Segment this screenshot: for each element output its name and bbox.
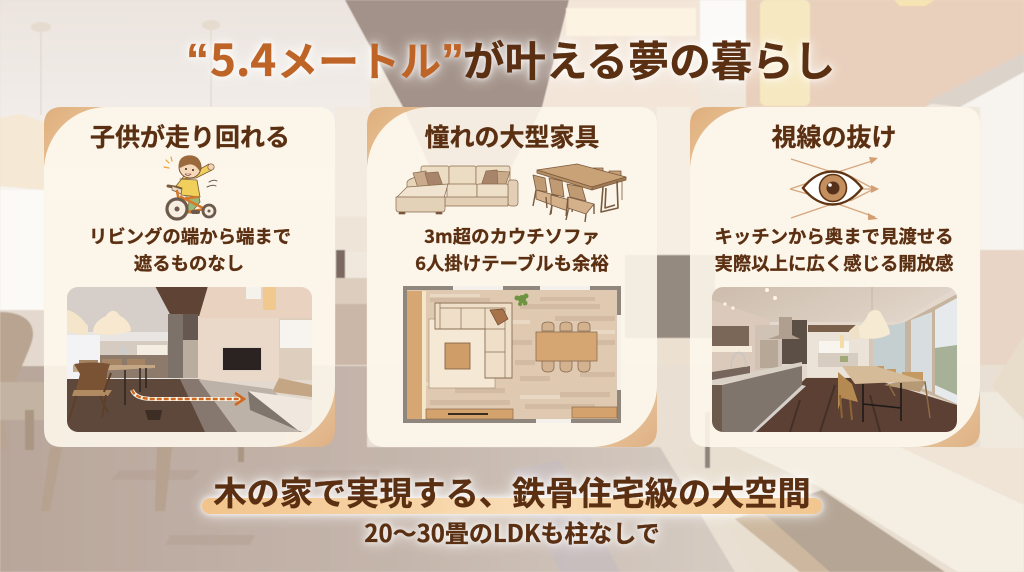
title: メートル <box>277 28 441 88</box>
highlight pill <box>202 498 822 514</box>
text: description: リビングの端から端まで <box>89 223 291 249</box>
bottom headline: 木の家で実現する、鉄骨住宅級の大空間 <box>213 466 811 515</box>
text: description: キッチンから奥まで見渡せる <box>714 223 954 249</box>
text: description: 6人掛けテーブルも余裕 <box>415 250 609 276</box>
plant <box>514 294 528 306</box>
panel: large furniture <box>367 107 657 447</box>
sofa on plan <box>435 303 512 378</box>
heading: 子供が走り回れる: 子供が走り回れる <box>90 118 290 154</box>
text: description <box>89 223 291 276</box>
heading: 憧れの大型家具: 憧れの大型家具 <box>424 118 600 154</box>
heading: 視線の抜け: 視線の抜け <box>771 118 897 154</box>
icon: eye with sight lines <box>790 157 879 220</box>
title: ” <box>441 34 464 86</box>
icon: couch sofa <box>396 166 518 214</box>
bottom subheading: 20〜30畳のLDKも柱なしで <box>364 514 660 549</box>
photo: living room with dashed path arrow <box>67 286 312 432</box>
coffee table <box>445 343 470 369</box>
text: description: 3m超のカウチソファ <box>424 223 600 249</box>
text: description <box>714 223 954 276</box>
icon: dining table with chairs <box>533 164 626 222</box>
title: 5.4 <box>210 25 276 89</box>
text: description: 遮るものなし <box>134 250 244 276</box>
dining table on plan <box>536 322 597 372</box>
text: description <box>415 223 609 276</box>
panel: children run around <box>44 107 335 447</box>
title <box>186 25 835 89</box>
title: “ <box>186 34 209 86</box>
panel: open sight lines <box>690 107 980 447</box>
floor plan diagram <box>403 286 621 423</box>
icon: child on tricycle <box>164 155 217 219</box>
photo: kitchen and dining <box>712 286 957 432</box>
title: が叶える夢の暮らし <box>463 28 835 88</box>
text: description: 実際以上に広く感じる開放感 <box>714 250 954 276</box>
